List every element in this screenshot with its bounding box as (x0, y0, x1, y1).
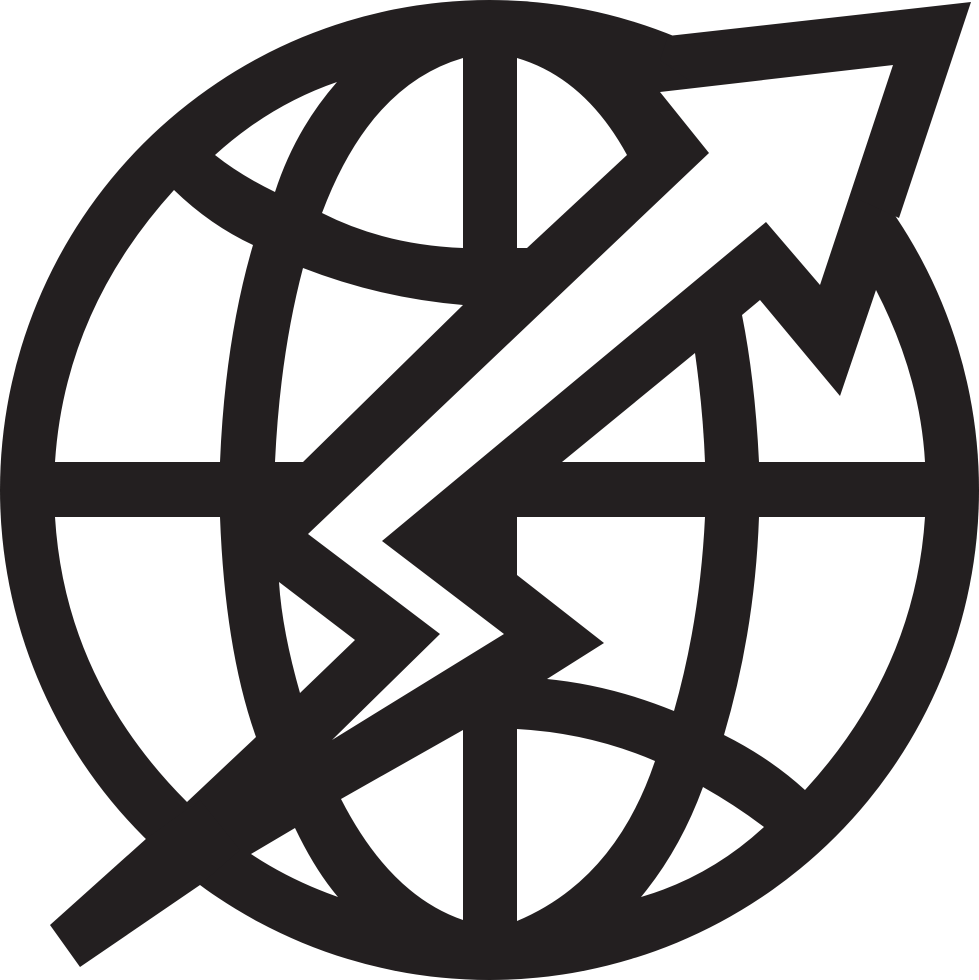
globe grid cells (55, 58, 925, 921)
arrow: white zigzag interior (308, 65, 893, 740)
